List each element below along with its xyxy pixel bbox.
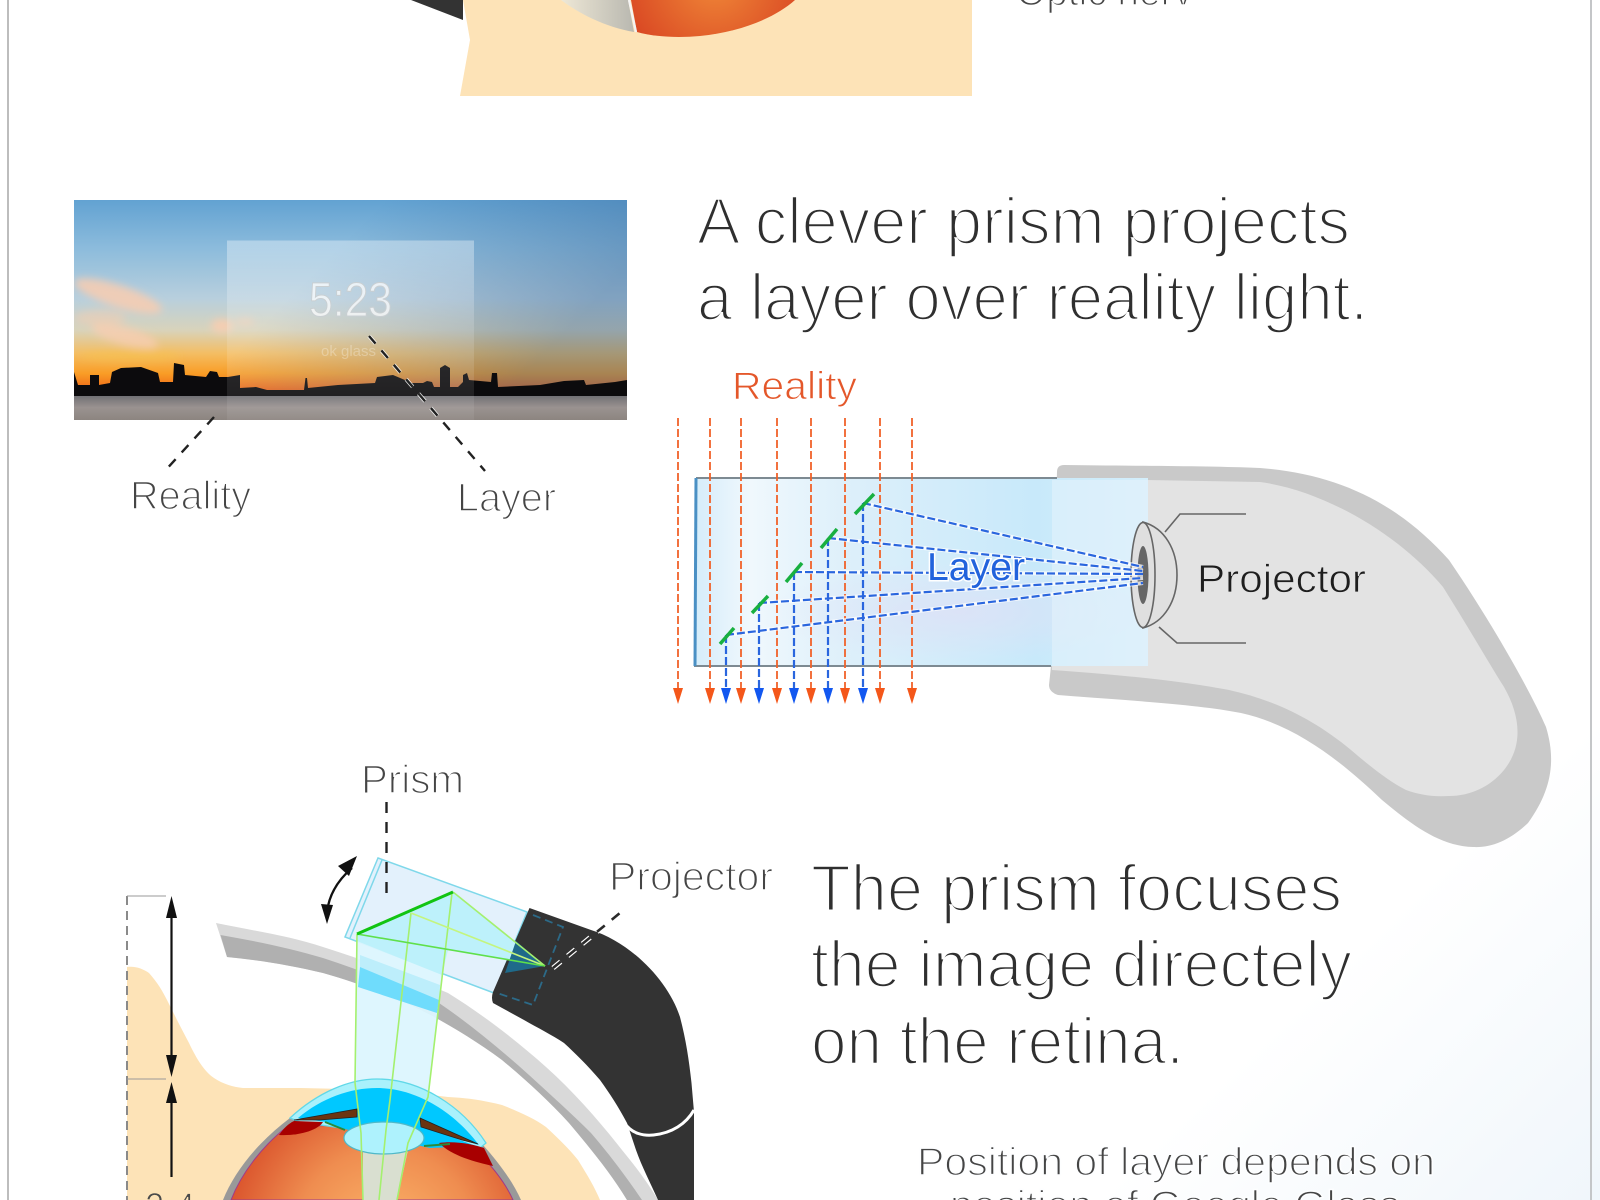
dashed internal housing (497, 915, 563, 1005)
right border (1590, 0, 1592, 1200)
ciliary right (439, 1142, 493, 1166)
dark housing (492, 908, 694, 1200)
eye interior (631, 0, 795, 37)
glasses lens arc light layer (216, 923, 658, 1200)
label: Projector lower: Projector (609, 855, 773, 899)
water (74, 395, 627, 420)
green prism mirror (357, 892, 453, 934)
left edge (695, 478, 696, 666)
hinge line (624, 1110, 694, 1135)
note: position of layer: Position of layer depends on (917, 1141, 1435, 1184)
beam through air (355, 892, 453, 1097)
heading: prism focuses: the image directely (811, 927, 1352, 1001)
aqueous chamber (298, 1088, 479, 1145)
dimension markers (127, 896, 195, 1200)
left border (7, 0, 9, 1200)
label: Projector: Projector (1197, 558, 1366, 601)
dome (1143, 522, 1177, 628)
lens rim (1131, 522, 1155, 628)
dashed reference line (126, 896, 128, 1200)
skin profile (127, 967, 600, 1200)
sclera (223, 1118, 521, 1200)
crystalline lens (344, 1122, 424, 1154)
ok glass text: ok glass (321, 343, 376, 360)
lower arrow head (166, 1082, 177, 1103)
green micro mirrors (720, 494, 874, 644)
leader: overlay to Layer label (369, 336, 485, 471)
upper double arrow (170, 905, 173, 1070)
note: position of layer (917, 1141, 1435, 1200)
lower arrow (170, 1095, 173, 1177)
beam in lens light (360, 955, 440, 1003)
upper arrow heads (166, 896, 177, 1077)
projector lens (1131, 514, 1246, 643)
prism glass (345, 858, 527, 993)
photo panel: reality with layer overlay (71, 200, 627, 420)
heading: prism focuses (811, 851, 1352, 1078)
heading: prism focuses: on the retina. (811, 1004, 1184, 1078)
dark housing fragment (411, 0, 463, 20)
pupil (1138, 546, 1148, 604)
glass layer overlay (227, 240, 474, 420)
bracket lines (1159, 514, 1246, 643)
tick lines (127, 896, 166, 1079)
label: Prism: Prism (361, 758, 464, 802)
top eye diagram fragment (411, 0, 972, 96)
iris left (294, 1109, 357, 1120)
chamber lower (325, 1118, 476, 1148)
white separator (629, 0, 636, 32)
green rays (355, 892, 545, 1200)
sclera wedge (561, 0, 634, 32)
blue layer rays (721, 503, 1143, 704)
housing outer shell (1049, 465, 1551, 847)
housing overlap (1052, 480, 1148, 666)
housing inner face (1052, 480, 1518, 796)
prism body (694, 478, 1150, 666)
lower eye cross-section (127, 858, 694, 1200)
label: Reality: Reality (130, 474, 251, 518)
beam in lens dark (358, 967, 439, 1013)
beam behind lens (363, 1150, 408, 1200)
lavender glow (770, 562, 1150, 662)
orange reality arrows (673, 418, 917, 704)
prism side edge (350, 860, 382, 938)
heading: clever prism (697, 184, 1368, 334)
beam in prism (357, 892, 545, 966)
iris right (420, 1118, 478, 1144)
heading: clever prism: A clever prism projects (697, 184, 1350, 258)
teal ray in housing (505, 941, 545, 973)
label: Layer blue: Layer (927, 546, 1025, 589)
prism glass fill (696, 478, 1148, 666)
heading: clever prism: a layer over reality light. (697, 260, 1368, 334)
ciliary left (279, 1121, 323, 1135)
projector housing (1049, 465, 1551, 847)
top edge (696, 477, 1057, 479)
clouds (74, 274, 252, 355)
heading: prism focuses: The prism focuses (811, 851, 1342, 925)
rotation arrow (321, 856, 357, 924)
retina interior (231, 1125, 513, 1200)
glasses lens arc dark layer (220, 935, 642, 1200)
sky shading (240, 200, 627, 390)
leader: Projector lower (553, 908, 626, 968)
label: Reality orange: Reality (732, 365, 858, 408)
skyline (74, 363, 627, 396)
cornea outer (290, 1079, 486, 1148)
time text: 5:23 (309, 274, 392, 327)
zonule fibres (325, 1122, 450, 1146)
leader: Prism (385, 802, 388, 897)
skin area (460, 0, 972, 96)
beam lower prism part (357, 934, 448, 975)
leader: photo to Reality label (163, 417, 214, 473)
label: Layer: Layer (457, 476, 556, 520)
sky (74, 200, 627, 397)
bottom edge (694, 665, 1051, 667)
